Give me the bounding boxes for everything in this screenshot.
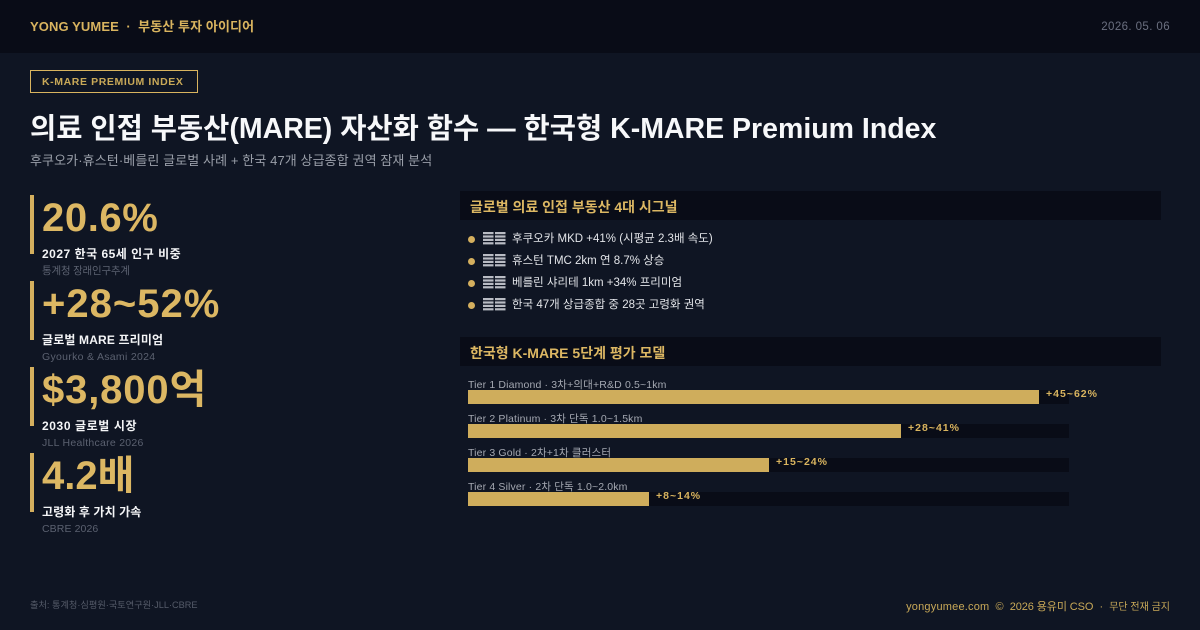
tier 2 bar — [468, 413, 1069, 438]
tier 4 bar: Tier 4 Silver · 2차 단독 1.0~2.0km — [468, 481, 628, 493]
stat: 4.2배 — [30, 453, 141, 534]
stat: $3,800억: $3,800억 — [42, 368, 207, 412]
date: 2026. 05. 06 — [1101, 21, 1170, 33]
signal 1: 후쿠오카 MKD +41% (시평균 2.3배 속도) — [512, 233, 713, 245]
tier 2 bar: +28~41% — [908, 422, 960, 434]
tier 4 bar: +8~14% — [656, 490, 701, 502]
footer credit: yongyumee.com © 2026 용유미 CSO · 무단 전재 금지 — [906, 601, 1170, 613]
stat: +28~52%: Gyourko & Asami 2024 — [42, 350, 155, 362]
badge: K-MARE PREMIUM INDEX — [42, 76, 184, 88]
tier 2 bar: Tier 2 Platinum · 3차 단독 1.0~1.5km — [468, 413, 642, 425]
source note: 출처: 통계청·심평원·국토연구원·JLL·CBRE — [30, 600, 198, 610]
tier 3 bar: Tier 3 Gold · 2차+1차 클러스터 — [468, 447, 611, 459]
tier 1 bar: Tier 1 Diamond · 3차+의대+R&D 0.5~1km — [468, 379, 667, 391]
subtitle: 후쿠오카·휴스턴·베를린 글로벌 사례 + 한국 47개 상급종합 권역 잠재 분석 — [30, 153, 432, 168]
stat: 4.2배: CBRE 2026 — [42, 522, 98, 534]
stat: $3,800억 — [30, 367, 207, 448]
stat: +28~52% — [30, 281, 220, 362]
badge — [30, 70, 198, 93]
stat: $3,800억: 2030 글로벌 시장 — [42, 419, 137, 433]
title: 의료 인접 부동산(MARE) 자산화 함수 — 한국형 K-MARE Premium Index — [30, 113, 936, 145]
stat: 20.6% — [30, 195, 181, 276]
signal 4: 한국 47개 상급종합 중 28곳 고령화 권역 — [512, 299, 705, 311]
heading: tier model — [460, 337, 1161, 366]
stat: 4.2배: 4.2배 — [42, 454, 134, 498]
heading: global signals: 글로벌 의료 인접 부동산 4대 시그널 — [470, 199, 678, 215]
heading: tier model: 한국형 K-MARE 5단계 평가 모델 — [470, 345, 665, 361]
tier 1 bar: +45~62% — [1046, 388, 1098, 400]
heading: global signals — [460, 191, 1161, 220]
stat: 20.6%: 20.6% — [42, 196, 158, 240]
stat: $3,800억: JLL Healthcare 2026 — [42, 436, 144, 448]
signal 2: 휴스턴 TMC 2km 연 8.7% 상승 — [512, 255, 664, 267]
stat: 20.6%: 2027 한국 65세 인구 비중 — [42, 247, 181, 261]
stat: 4.2배: 고령화 후 가치 가속 — [42, 505, 141, 519]
header bar — [0, 0, 1200, 53]
signal 3: 베를린 샤리테 1km +34% 프리미엄 — [512, 277, 682, 289]
tier 3 bar: +15~24% — [776, 456, 828, 468]
stat: 20.6%: 통계청 장래인구추계 — [42, 264, 130, 276]
stat: +28~52%: 글로벌 MARE 프리미엄 — [42, 333, 163, 347]
tier 4 bar — [468, 481, 1069, 506]
tier 3 bar — [468, 447, 1069, 472]
brand: YONG YUMEE · 부동산 투자 아이디어 — [30, 19, 254, 34]
stat: +28~52%: +28~52% — [42, 282, 220, 326]
tier 1 bar — [468, 379, 1098, 404]
